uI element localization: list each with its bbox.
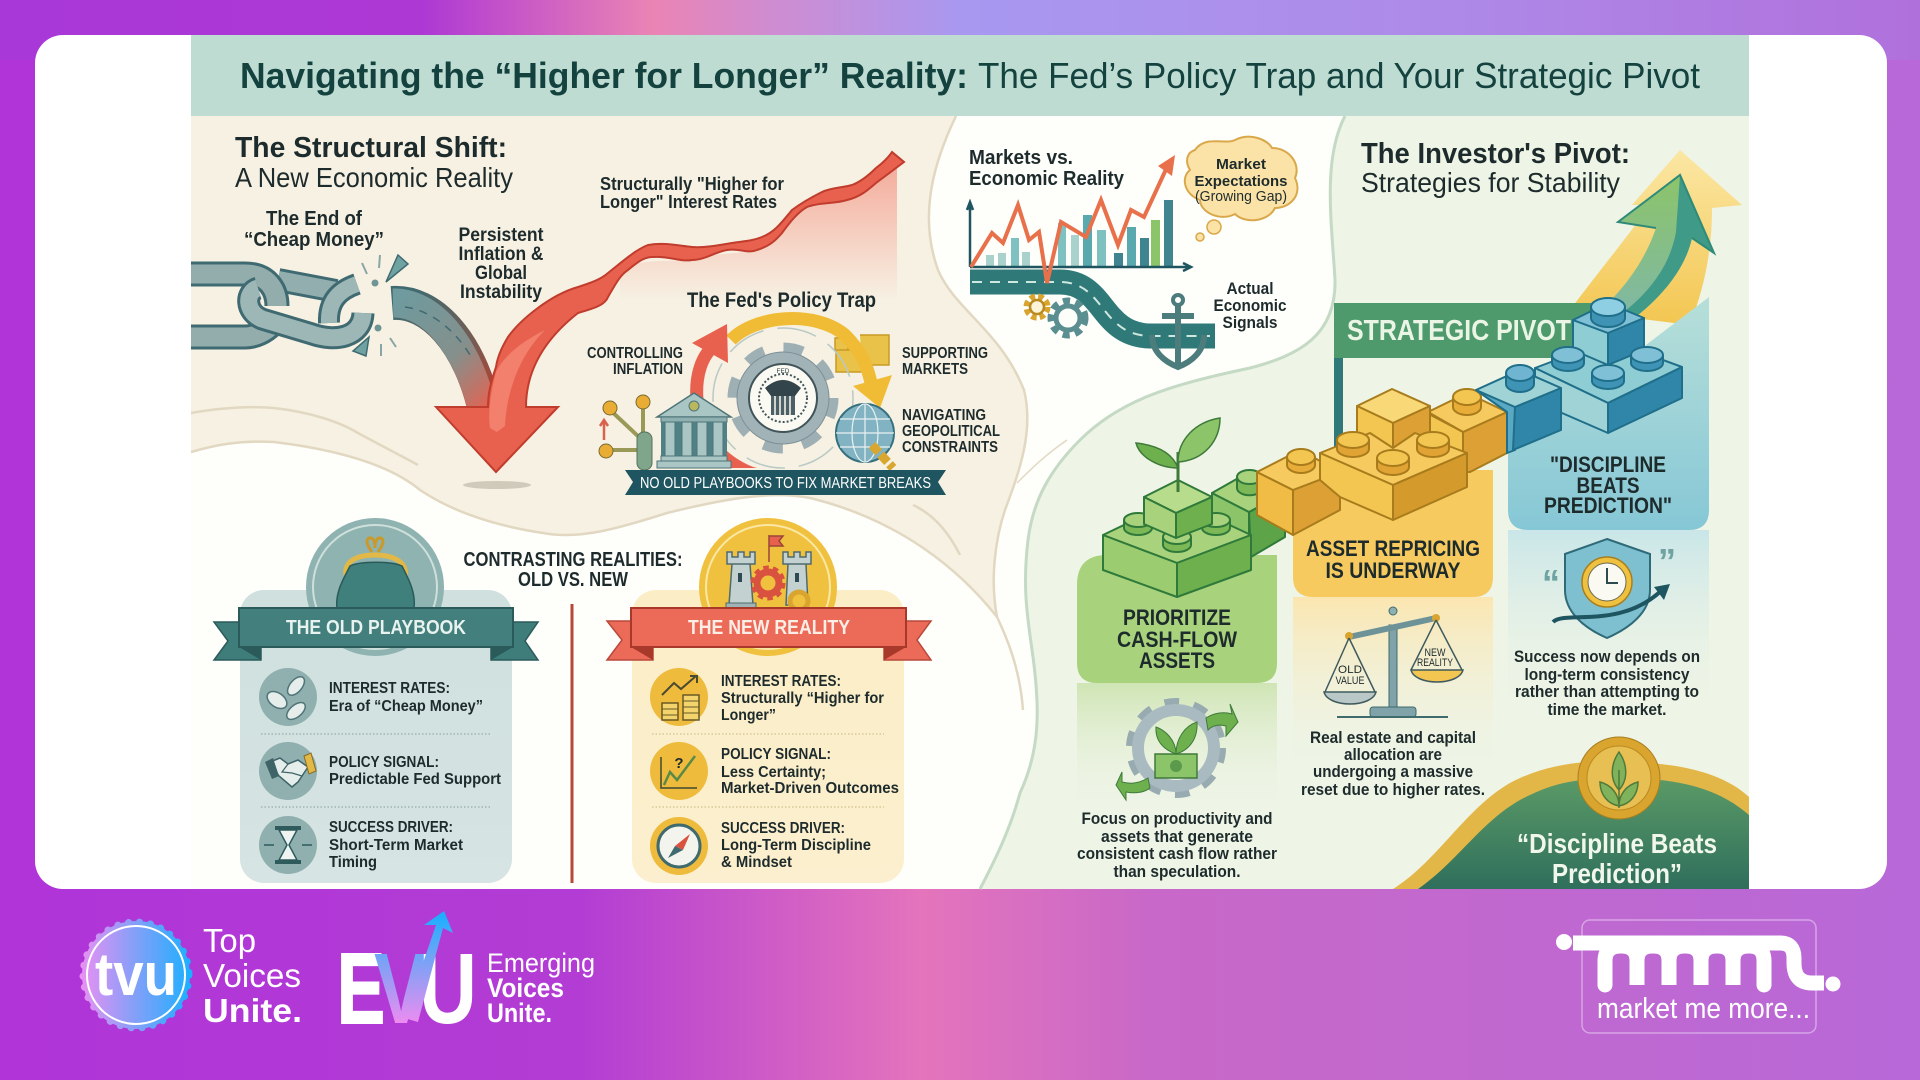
text: top voices unite [203, 922, 302, 1029]
logo: top voices unite [82, 921, 302, 1029]
text: prioritize cash-flow assets: PRIORITIZE [1123, 605, 1231, 630]
label: actual economic signals: Actual [1226, 279, 1274, 298]
icon: gears [1027, 297, 1085, 335]
banner: old playbook [214, 608, 538, 660]
panel: green card fade [1077, 683, 1277, 813]
text: real estate [1301, 728, 1485, 799]
text: discipline beats prediction: "DISCIPLINE [1550, 452, 1666, 477]
old row: success driver: Timing [329, 854, 377, 871]
new row: policy signal: Market-Driven Outcomes [721, 780, 899, 797]
old row: policy signal: Predictable Fed Support [329, 771, 502, 788]
banner: new reality: THE NEW REALITY [688, 617, 851, 639]
text: success now depends: time the market. [1548, 700, 1666, 719]
panel: yellow card fade [1293, 597, 1493, 777]
banner: no old playbooks: NO OLD PLAYBOOKS TO FIX MARKET BREAKS [640, 475, 931, 492]
heading: Markets vs. [969, 147, 1073, 169]
text: emerging voices unite [487, 948, 595, 1028]
text: prioritize cash-flow assets: CASH-FLOW [1117, 627, 1237, 652]
label: persistent inflation: Global [475, 263, 527, 284]
text: asset repricing: IS UNDERWAY [1326, 558, 1461, 583]
label: end of cheap money: The End of [266, 208, 362, 230]
pale green background: investor pivot region [980, 116, 1749, 889]
text: emerging voices unite: Voices [487, 973, 564, 1003]
new row: policy signal [650, 742, 899, 800]
text: focus on productivity: assets that generate [1101, 827, 1253, 846]
icon: lever [599, 395, 652, 470]
new row: policy signal: ? [674, 755, 684, 772]
icon: balance scale: NEW [1424, 647, 1446, 659]
icon: green blocks [1103, 470, 1285, 597]
heading: Strategies for Stability [1361, 167, 1620, 198]
pivot region boundary line [980, 116, 1345, 889]
text: asset repricing [1306, 536, 1480, 583]
text: focus on productivity: consistent cash flow rather [1077, 844, 1277, 863]
chart: road [970, 282, 1215, 336]
arrow shadow [463, 481, 531, 489]
icon: evu mark: V [374, 933, 428, 1045]
text: real estate: allocation are [1344, 745, 1442, 764]
heading: Economic Reality [969, 168, 1125, 190]
banner: new reality [607, 608, 931, 660]
panel: contrasting realities [214, 518, 931, 883]
icon: anchor [1152, 295, 1204, 367]
label: higher for longer rates: Structurally "Higher for [600, 174, 784, 194]
icon: plant sprout [1136, 418, 1220, 492]
icon: evu mark: U [419, 933, 477, 1045]
new row: success driver: SUCCESS DRIVER: [721, 820, 845, 837]
new badge circle [699, 518, 837, 656]
icon: gear with money [1116, 704, 1238, 800]
heading: The Investor's Pivot: [1361, 138, 1630, 170]
text: success now depends: long-term consistency [1524, 665, 1690, 684]
arrow: broken chain descent [392, 303, 486, 415]
icon: shield with clock [1542, 539, 1676, 638]
logo: market me more [1556, 920, 1840, 1033]
new: row dividers [652, 734, 884, 807]
text: success now depends: rather than attempting to [1515, 682, 1699, 701]
label: actual economic signals: Signals [1222, 313, 1278, 332]
text: discipline beats prediction quote: Prediction” [1552, 858, 1682, 889]
chart: axes [967, 202, 1191, 271]
heading: The Structural Shift: [235, 132, 507, 164]
title: Navigating the “Higher for Longer” Reality: [240, 55, 968, 96]
panel: structural shift [191, 132, 904, 489]
text: top voices unite: Voices [203, 957, 301, 994]
new panel card [632, 590, 904, 883]
new row: success driver [650, 817, 871, 875]
text: discipline beats prediction: PREDICTION" [1544, 493, 1672, 518]
text: discipline beats prediction [1544, 452, 1672, 518]
centre divider [570, 604, 574, 883]
heading: The Fed's Policy Trap [687, 289, 876, 312]
icon: fed gear seal [734, 349, 832, 447]
chart: bars [986, 200, 1173, 266]
white card [35, 35, 1887, 889]
panel: investor pivot [1077, 138, 1749, 889]
text: discipline beats prediction quote [1517, 828, 1717, 889]
text: success now depends: Success now depends on [1514, 647, 1700, 666]
label: geopolitical constraints: GEOPOLITICAL [902, 423, 1000, 440]
label: controlling inflation: CONTROLLING [587, 345, 683, 362]
icon: bank building [657, 393, 731, 468]
text: top voices unite: Unite. [203, 992, 302, 1029]
icon: tvu badge: tvu [95, 941, 177, 1008]
new row: success driver: Long-Term Discipline [721, 837, 871, 854]
heading: A New Economic Reality [235, 162, 513, 193]
old row: interest rates: Era of “Cheap Money” [329, 698, 483, 715]
old row: policy signal [259, 742, 502, 800]
icon: evu mark [337, 911, 477, 1045]
label: higher for longer rates: Longer" Interest Rates [600, 192, 777, 212]
callout: market expectations [1185, 137, 1297, 241]
text: top voices unite: Top [203, 922, 256, 959]
text: success now depends [1514, 647, 1700, 719]
subtitle: The Fed’s Policy Trap and Your Strategic Pivot [978, 55, 1700, 96]
infographic panel base [191, 116, 1749, 889]
label: controlling inflation [587, 345, 683, 378]
icon: yellow blocks [1257, 389, 1507, 535]
chart: red line [971, 155, 1175, 283]
icon: shield with clock: “ [1542, 562, 1560, 603]
new row: interest rates: Structurally “Higher for [721, 690, 884, 707]
label: geopolitical constraints: CONSTRAINTS [902, 439, 998, 456]
icon: balance scale: REALITY [1417, 657, 1454, 669]
banner: strategic pivot [1334, 303, 1596, 448]
label: actual economic signals [1214, 279, 1286, 332]
banner: no old playbooks [625, 470, 946, 495]
label: persistent inflation: Instability [460, 282, 542, 303]
heading: contrasting realities: OLD VS. NEW [518, 569, 628, 591]
old row: interest rates [259, 668, 483, 726]
old row: success driver: SUCCESS DRIVER: [329, 819, 453, 836]
heading [969, 147, 1125, 190]
arrow: yellow rising [1570, 150, 1742, 325]
callout: market expectations: Market [1216, 156, 1266, 173]
panel: fed policy trap [587, 289, 1000, 495]
panel: blue card fade [1508, 530, 1709, 720]
label: actual economic signals: Economic [1214, 296, 1286, 315]
icon: shield with clock: ” [1658, 541, 1676, 582]
cream boundary lines [191, 116, 1067, 710]
new row: interest rates [650, 668, 884, 726]
icon: mmm mark [1556, 934, 1840, 992]
label: geopolitical constraints [902, 407, 1000, 456]
old: row dividers [261, 734, 492, 807]
label: supporting markets: SUPPORTING [902, 345, 988, 362]
text: discipline beats prediction quote: “Discipline Beats [1517, 828, 1717, 859]
icon: globe and chain [836, 404, 894, 468]
text: real estate: undergoing a massive [1313, 762, 1473, 781]
new row: interest rates: Longer” [721, 707, 776, 724]
icon: blue blocks [1476, 298, 1682, 453]
arrow: green rising [1590, 175, 1714, 325]
callout: market expectations: Expectations [1194, 173, 1288, 190]
callout: market expectations: (Growing Gap) [1195, 188, 1287, 205]
text: discipline beats prediction: BEATS [1576, 473, 1640, 498]
label: persistent inflation [458, 225, 544, 303]
chart: rate area fill [620, 158, 897, 300]
new row: interest rates: INTEREST RATES: [721, 673, 841, 690]
text: asset repricing: ASSET REPRICING [1306, 536, 1480, 561]
icon: purse [337, 538, 414, 608]
banner: old playbook: THE OLD PLAYBOOK [286, 617, 466, 639]
background top band [0, 0, 1920, 60]
label: supporting markets: MARKETS [902, 361, 968, 378]
logo: emerging voices unite [337, 911, 595, 1045]
new row: policy signal: POLICY SIGNAL: [721, 746, 831, 763]
old row: interest rates: INTEREST RATES: [329, 680, 450, 697]
text: prioritize cash-flow assets: ASSETS [1139, 648, 1215, 673]
new row: policy signal: Less Certainty; [721, 764, 826, 781]
icon: fed gear seal: FED [776, 368, 790, 375]
label: end of cheap money [244, 208, 384, 251]
text: emerging voices unite: Unite. [487, 998, 552, 1028]
logo: market me more: market me more... [1597, 993, 1810, 1025]
text: emerging voices unite: Emerging [487, 948, 595, 978]
text: real estate: Real estate and capital [1310, 728, 1476, 747]
panel: markets vs economic reality [967, 137, 1297, 367]
old panel card [240, 590, 512, 883]
label: supporting markets [902, 345, 988, 378]
icon: fed cycle arrows [692, 319, 892, 468]
heading: contrasting realities [464, 549, 682, 591]
old row: success driver [259, 816, 464, 874]
icon: evu mark: E [337, 933, 385, 1045]
label: higher for longer rates [600, 174, 784, 212]
label: geopolitical constraints: NAVIGATING [902, 407, 986, 424]
arrow: red rate line [436, 152, 904, 472]
label: end of cheap money: “Cheap Money” [244, 229, 384, 251]
icon: balance scale [1324, 607, 1463, 718]
icon: balance scale: OLD [1338, 664, 1362, 676]
header band [191, 35, 1749, 116]
panel: green card [1077, 555, 1277, 683]
old badge circle [306, 518, 444, 656]
panel: blue card [1508, 297, 1709, 530]
heading [1361, 138, 1630, 198]
icon: castle and gears [726, 535, 811, 610]
label: controlling inflation: INFLATION [613, 361, 683, 378]
icon: balance scale: VALUE [1336, 675, 1364, 687]
text: focus on productivity [1077, 809, 1277, 881]
text: focus on productivity: than speculation. [1114, 862, 1240, 881]
panel: yellow card [1293, 470, 1493, 597]
icon: broken chain [191, 255, 408, 356]
banner: strategic pivot: STRATEGIC PIVOT [1347, 315, 1571, 347]
text: real estate: reset due to higher rates. [1301, 780, 1485, 799]
new row: success driver: & Mindset [721, 854, 793, 871]
panel: discipline hill [1393, 737, 1749, 889]
icon: medallion [1578, 737, 1660, 819]
heading: contrasting realities: CONTRASTING REALITIES: [464, 549, 682, 571]
old row: policy signal: POLICY SIGNAL: [329, 754, 439, 771]
label: persistent inflation: Persistent [458, 225, 544, 246]
heading [235, 132, 513, 193]
cream background: structural shift region [191, 116, 1027, 617]
icon: tvu badge [82, 921, 190, 1029]
old row: success driver: Short-Term Market [329, 837, 464, 854]
text: prioritize cash-flow assets [1117, 605, 1237, 673]
text: focus on productivity: Focus on productivity and [1082, 809, 1272, 828]
label: persistent inflation: Inflation & [458, 244, 544, 265]
